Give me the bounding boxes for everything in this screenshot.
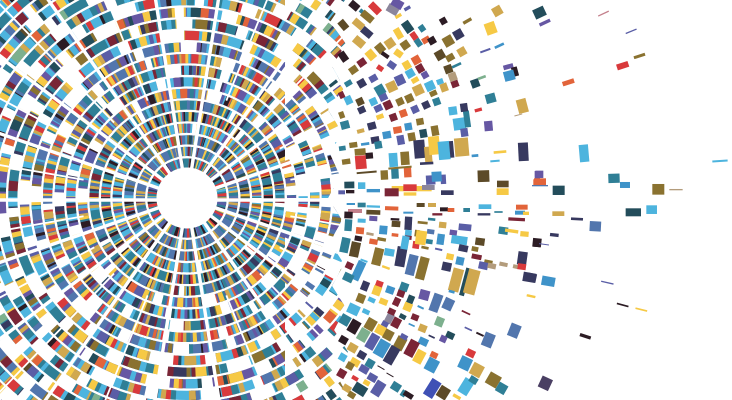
white radial spokes separating sectors (0, 0, 342, 400)
white gaps thinning the rings toward the right (285, 0, 350, 400)
scattered fragments dissolving to the right (336, 0, 728, 400)
far right sparse fragments (526, 6, 728, 391)
upper fragments (337, 0, 540, 196)
radial ring chart of coloured segments (0, 0, 348, 400)
central white hole (156, 168, 218, 228)
lower fragments (336, 203, 541, 400)
